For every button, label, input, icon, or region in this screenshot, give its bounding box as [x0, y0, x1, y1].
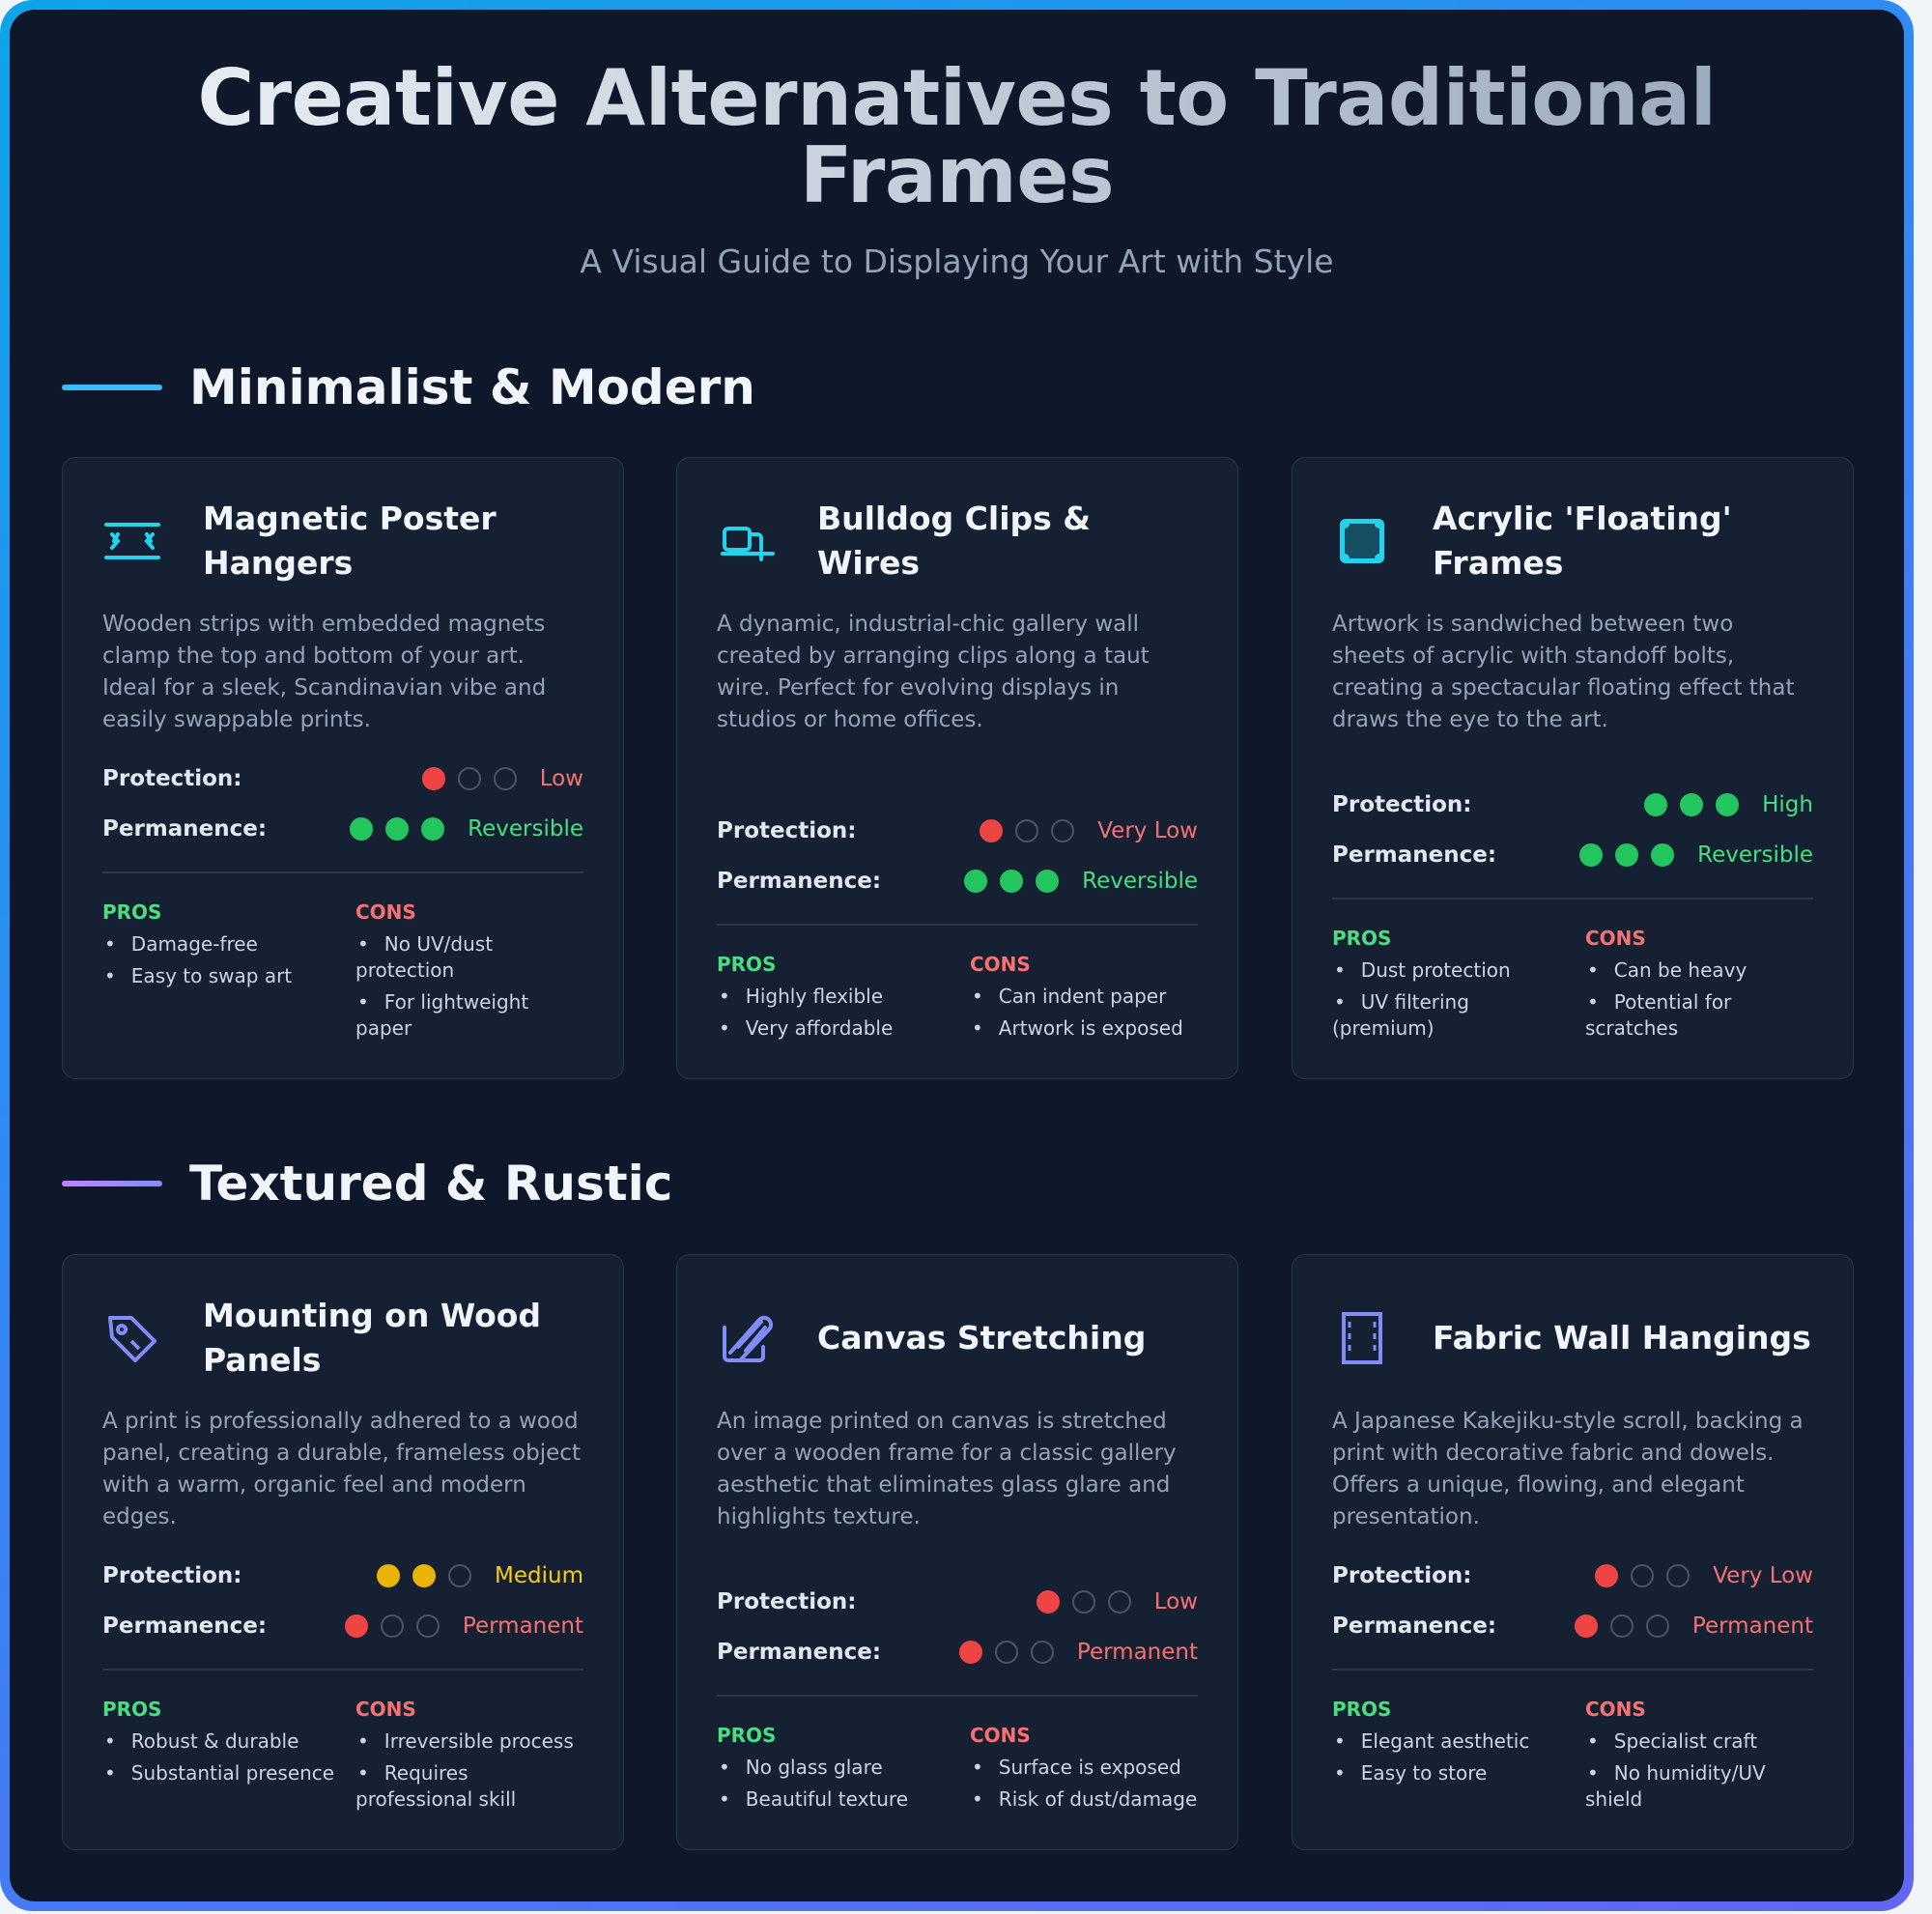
- description: [717, 612, 1150, 732]
- description: presentation.: [1332, 1504, 1480, 1529]
- rating: protection: [717, 818, 1198, 843]
- pros and cons: Requires professional skill: [355, 1761, 516, 1811]
- pros and cons: Can indent paper: [999, 985, 1166, 1008]
- rating: permanence: [102, 1614, 583, 1639]
- title: [0, 60, 1914, 214]
- description: Artwork is sandwiched between two: [1332, 612, 1733, 637]
- description: [102, 612, 546, 732]
- pros and cons: Very affordable: [746, 1016, 893, 1040]
- description: [717, 1409, 1177, 1529]
- rating: permanence: Reversible: [468, 816, 583, 842]
- icon: canvas: Canvas Stretching: [817, 1319, 1146, 1357]
- rating: permanence: Permanence:: [1332, 1614, 1496, 1639]
- rating: protection: [1332, 1563, 1813, 1588]
- pros and cons: CONS: [970, 953, 1031, 976]
- icon: canvas: [723, 1316, 1146, 1362]
- pros and cons: Dust protection: [1361, 958, 1511, 982]
- rating: permanence: [1332, 843, 1813, 868]
- icon: bulldog clip: Wires: [817, 544, 920, 582]
- icon: bulldog clip: [721, 500, 1091, 582]
- pros and cons: CONS: [355, 1698, 416, 1721]
- pros and cons: [717, 953, 1183, 1040]
- icon: magnetic hanger: [104, 500, 497, 582]
- rating: permanence: Permanence:: [1332, 843, 1496, 868]
- pros and cons: PROS: [102, 900, 161, 924]
- pros and cons: No humidity/UV shield: [1585, 1761, 1766, 1811]
- icon: acrylic frame: Acrylic 'Floating': [1433, 500, 1732, 537]
- pros and cons: PROS: [1332, 1698, 1391, 1721]
- description: created by arranging clips along a taut: [717, 643, 1150, 669]
- rating: permanence: Permanent: [463, 1614, 583, 1639]
- icon: bulldog clip: Bulldog Clips &: [817, 500, 1091, 537]
- title: Creative Alternatives to Traditional: [197, 53, 1717, 143]
- title: Frames: [800, 130, 1114, 220]
- description: panel, creating a durable, frameless object: [102, 1441, 581, 1466]
- pros and cons: CONS: [1585, 1698, 1646, 1721]
- pros and cons: No UV/dust protection: [355, 932, 493, 982]
- rating: protection: Protection:: [1332, 792, 1471, 817]
- pros and cons: Elegant aesthetic: [1361, 1729, 1529, 1753]
- rating: protection: [102, 1563, 583, 1588]
- pros and cons: Easy to swap art: [131, 964, 292, 987]
- pros and cons: PROS: [717, 1724, 776, 1747]
- rating: protection: Medium: [495, 1563, 583, 1588]
- pros and cons: Specialist craft: [1614, 1729, 1757, 1753]
- description: An image printed on canvas is stretched: [717, 1409, 1167, 1434]
- rating: protection: Very Low: [1097, 818, 1198, 843]
- pros and cons: Risk of dust/damage: [999, 1787, 1197, 1811]
- description: A dynamic, industrial-chic gallery wall: [717, 612, 1139, 637]
- pros and cons: UV filtering (premium): [1332, 990, 1469, 1040]
- description: with a warm, organic feel and modern: [102, 1472, 526, 1498]
- card: Mounting on Wood Panels: [62, 1254, 624, 1850]
- rating: permanence: [102, 816, 583, 842]
- pros and cons: CONS: [355, 900, 416, 924]
- pros and cons: Easy to store: [1361, 1761, 1487, 1785]
- rating: protection: Protection:: [717, 1589, 856, 1614]
- card: Acrylic Floating Frames: [1292, 457, 1854, 1079]
- rating: protection: Protection:: [717, 818, 856, 843]
- pros and cons: PROS: [717, 953, 776, 976]
- section heading: Textured & Rustic: Textured & Rustic: [189, 1156, 672, 1212]
- rating: protection: [717, 1589, 1198, 1614]
- description: Wooden strips with embedded magnets: [102, 612, 545, 637]
- icon: tag: Panels: [203, 1341, 321, 1379]
- pros and cons: Beautiful texture: [746, 1787, 908, 1811]
- card: Canvas Stretching: [676, 1254, 1238, 1850]
- card: Magnetic Poster Hangers: [62, 457, 624, 1079]
- rating: protection: Protection:: [1332, 1563, 1471, 1588]
- rating: permanence: Permanent: [1077, 1640, 1198, 1665]
- pros and cons: PROS: [102, 1698, 161, 1721]
- icon: magnetic hanger: Magnetic Poster: [203, 500, 497, 537]
- rating: permanence: [1332, 1614, 1813, 1639]
- description: draws the eye to the art.: [1332, 707, 1608, 732]
- rating: permanence: Permanence:: [717, 1640, 881, 1665]
- pros and cons: No glass glare: [746, 1756, 883, 1779]
- rating: protection: Protection:: [102, 766, 242, 791]
- pros and cons: Substantial presence: [131, 1761, 334, 1785]
- pros and cons: [717, 1724, 1197, 1811]
- pros and cons: Potential for scratches: [1585, 990, 1731, 1040]
- rating: permanence: Permanence:: [102, 816, 267, 842]
- rating: permanence: Permanent: [1692, 1614, 1813, 1639]
- description: [1332, 612, 1795, 732]
- description: Offers a unique, flowing, and elegant: [1332, 1472, 1745, 1498]
- card: Bulldog Clips & Wires: [676, 457, 1238, 1079]
- pros and cons: [1332, 1698, 1766, 1811]
- description: A Japanese Kakejiku-style scroll, backing a: [1332, 1409, 1804, 1434]
- icon: magnetic hanger: Hangers: [203, 544, 353, 582]
- pros and cons: [102, 1698, 574, 1811]
- section heading: Minimalist & Modern: Minimalist & Modern: [189, 359, 755, 415]
- pros and cons: [1332, 927, 1747, 1040]
- pros and cons: Highly flexible: [746, 985, 883, 1008]
- rating: protection: Protection:: [102, 1563, 242, 1588]
- pros and cons: Can be heavy: [1614, 958, 1747, 982]
- pros and cons: For lightweight paper: [355, 990, 528, 1040]
- icon: scroll: [1342, 1312, 1811, 1364]
- description: sheets of acrylic with standoff bolts,: [1332, 643, 1734, 669]
- pros and cons: Irreversible process: [384, 1729, 574, 1753]
- icon: tag: [108, 1297, 541, 1379]
- icon: acrylic frame: [1340, 500, 1732, 582]
- rating: permanence: [717, 869, 1198, 894]
- description: clamp the top and bottom of your art.: [102, 643, 525, 669]
- icon: scroll: Fabric Wall Hangings: [1433, 1319, 1811, 1357]
- description: [1332, 1409, 1804, 1529]
- pros and cons: PROS: [1332, 927, 1391, 950]
- description: creating a spectacular floating effect that: [1332, 675, 1795, 700]
- rating: permanence: Reversible: [1697, 843, 1813, 868]
- description: [102, 1409, 581, 1529]
- rating: protection: [102, 766, 583, 791]
- rating: protection: [1332, 792, 1813, 817]
- pros and cons: Surface is exposed: [999, 1756, 1181, 1779]
- rating: protection: High: [1762, 792, 1813, 817]
- rating: protection: Low: [540, 766, 583, 791]
- pros and cons: CONS: [970, 1724, 1031, 1747]
- rating: permanence: Permanence:: [102, 1614, 267, 1639]
- icon: tag: Mounting on Wood: [203, 1297, 541, 1334]
- rating: permanence: [717, 1640, 1198, 1665]
- pros and cons: Robust & durable: [131, 1729, 298, 1753]
- description: A print is professionally adhered to a wood: [102, 1409, 579, 1434]
- icon: acrylic frame: Frames: [1433, 544, 1563, 582]
- description: easily swappable prints.: [102, 707, 371, 732]
- card: Fabric Wall Hangings: [1292, 1254, 1854, 1850]
- pros and cons: [102, 900, 528, 1040]
- rating: protection: Low: [1154, 1589, 1198, 1614]
- subtitle: A Visual Guide to Displaying Your Art with Style: [580, 243, 1334, 280]
- description: wire. Perfect for evolving displays in: [717, 675, 1119, 700]
- pros and cons: CONS: [1585, 927, 1646, 950]
- description: over a wooden frame for a classic gallery: [717, 1441, 1177, 1466]
- description: aesthetic that eliminates glass glare and: [717, 1472, 1170, 1498]
- pros and cons: Damage-free: [131, 932, 258, 956]
- pros and cons: Artwork is exposed: [999, 1016, 1183, 1040]
- rating: permanence: Permanence:: [717, 869, 881, 894]
- rating: permanence: Reversible: [1082, 869, 1198, 894]
- description: Ideal for a sleek, Scandinavian vibe and: [102, 675, 546, 700]
- rating: protection: Very Low: [1713, 1563, 1813, 1588]
- description: edges.: [102, 1504, 177, 1529]
- description: print with decorative fabric and dowels.: [1332, 1441, 1774, 1466]
- description: highlights texture.: [717, 1504, 921, 1529]
- description: studios or home offices.: [717, 707, 983, 732]
